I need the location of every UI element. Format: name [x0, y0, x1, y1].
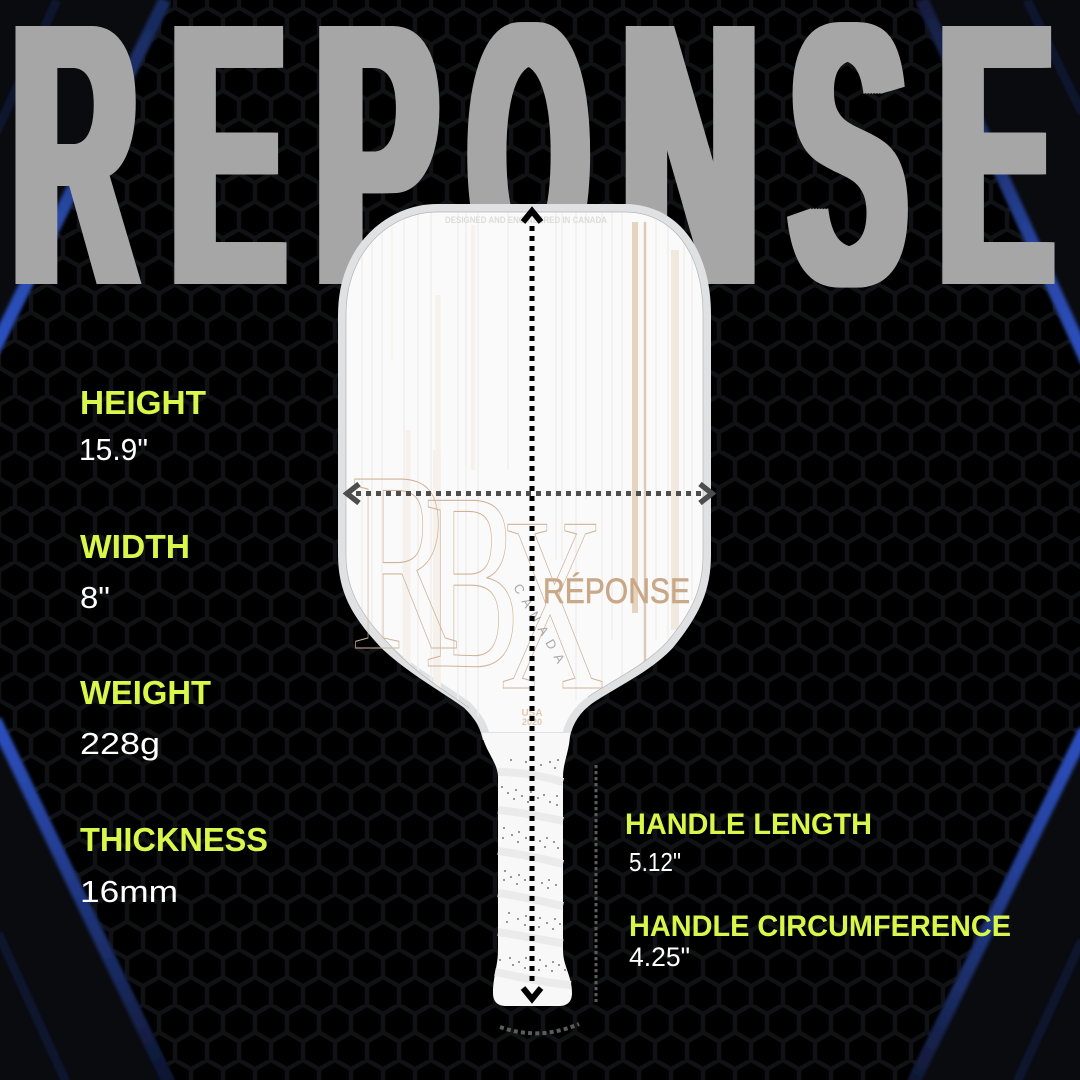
inner rim line [346, 212, 703, 708]
title [4, 0, 1055, 364]
spec: height: 15.9" [79, 432, 148, 467]
badge: USA [521, 708, 543, 727]
spec: thickness [80, 821, 268, 909]
top edge text: DESIGNED AND ENGINEERED IN CANADA [445, 215, 607, 225]
spec: handle circumference: 4.25" [629, 942, 690, 972]
spec: thickness: 16mm [80, 874, 178, 909]
badge: USA: 2020 [522, 717, 542, 727]
spec: handle length [625, 808, 872, 877]
spec: width: 8" [80, 580, 110, 615]
logo: RÉPONSE: RÉPONSE [543, 572, 690, 611]
handle [482, 733, 572, 1006]
arrow: paddle width [347, 484, 712, 503]
spec: handle length: 5.12" [629, 847, 681, 877]
face stripes [362, 210, 692, 720]
logo: RBX: X [500, 467, 605, 743]
spec: handle circumference: HANDLE CIRCUMFERENCE [629, 910, 1011, 943]
arrow: paddle height [523, 211, 541, 999]
spec: height: HEIGHT [80, 384, 206, 421]
spec: weight: WEIGHT [80, 674, 211, 711]
spec: thickness: THICKNESS [80, 821, 268, 858]
spec: width [80, 528, 190, 615]
spec: handle circumference [629, 910, 1011, 972]
spec: width: WIDTH [80, 528, 190, 565]
badge: USA: USA [521, 708, 543, 719]
paddle [342, 208, 707, 1006]
spec: weight [80, 674, 211, 761]
logo: RBX: B [424, 441, 520, 721]
spec: handle length: HANDLE LENGTH [625, 808, 872, 841]
arrow: handle circumference [500, 1024, 579, 1033]
paddle head [342, 208, 707, 736]
logo: CANADA: CANADA [510, 581, 571, 672]
logo: RBX [350, 420, 605, 743]
spec: weight: 228g [80, 726, 160, 761]
handle grip bands [495, 772, 571, 985]
arrow: handle length [594, 765, 598, 1002]
handle perforation dots [500, 760, 565, 971]
spec: height [79, 384, 206, 467]
logo: RBX: R [350, 420, 457, 704]
